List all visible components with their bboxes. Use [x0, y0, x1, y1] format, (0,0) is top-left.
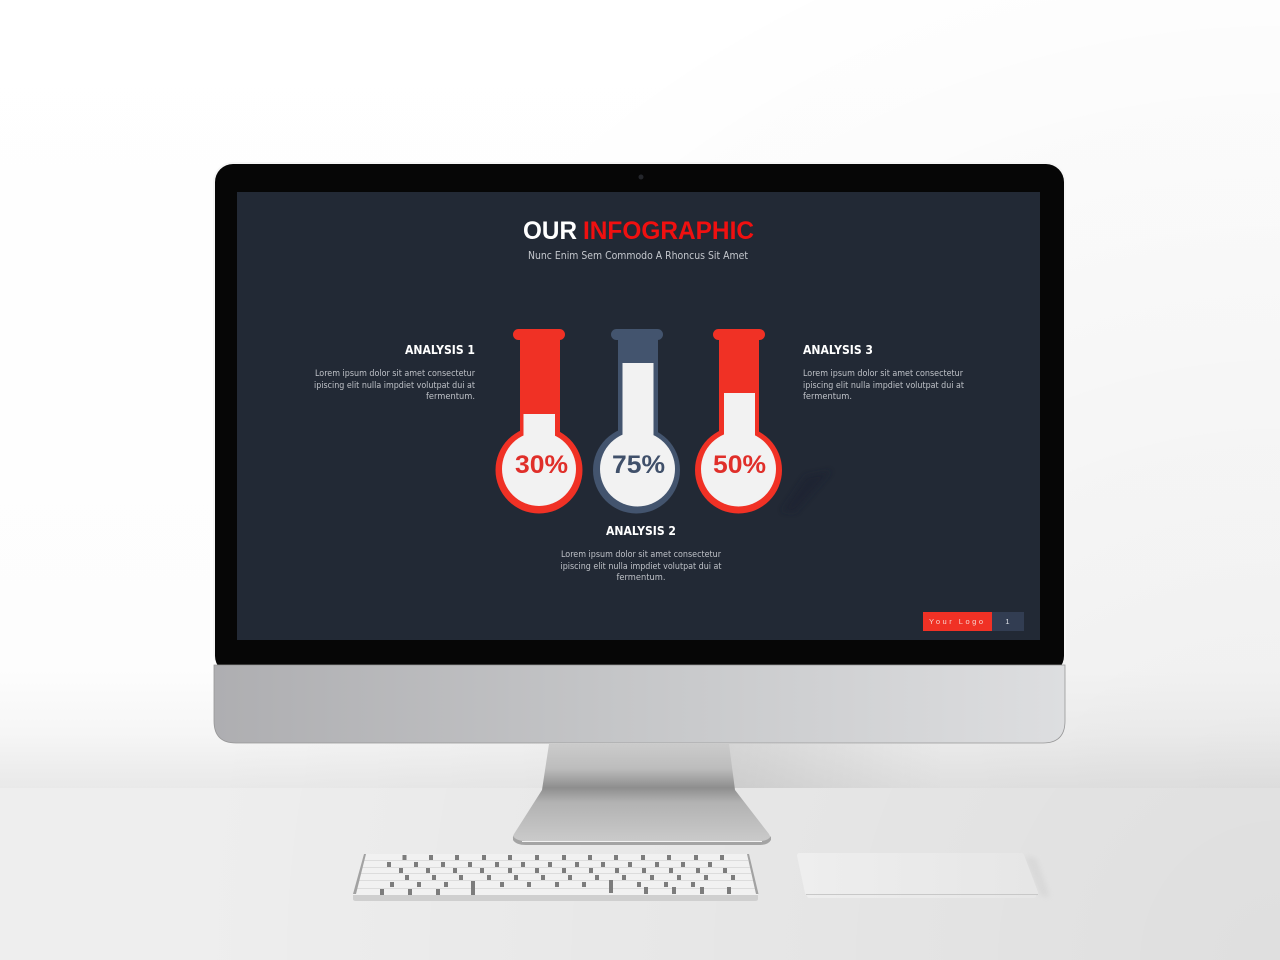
background: desk	[0, 788, 1280, 960]
title: OUR	[523, 217, 577, 245]
camera	[638, 174, 644, 180]
analysis 2 text block: Lorem ipsum dolor sit amet consectetur	[561, 550, 721, 560]
analysis 3 text block	[803, 343, 964, 402]
monitor stand	[513, 744, 771, 845]
analysis 2 text block: ANALYSIS 2	[606, 524, 676, 538]
analysis 1 text block: ANALYSIS 1	[405, 343, 475, 357]
analysis 2 text block	[560, 524, 722, 583]
analysis 1 text block: Lorem ipsum dolor sit amet consectetur	[315, 369, 475, 379]
value: 75%: 75%	[612, 451, 665, 479]
value: 50%: 50%	[713, 451, 766, 479]
flask 1: 30%	[496, 329, 582, 514]
analysis 1 text block	[314, 343, 475, 402]
title: INFOGRAPHIC	[583, 217, 754, 245]
monitor body	[213, 162, 1066, 743]
flask 3: 50%	[695, 329, 782, 514]
analysis 3 text block: Lorem ipsum dolor sit amet consectetur	[803, 369, 963, 379]
footer logo badge: Your Logo	[929, 617, 983, 626]
footer logo badge	[923, 612, 992, 631]
analysis 1 text block: ipiscing elit nulla impdiet volutpat dui at	[314, 381, 475, 391]
analysis 2 text block: ipiscing elit nulla impdiet volutpat dui at	[560, 562, 722, 572]
monitor chin	[214, 665, 1065, 743]
analysis 3 text block: ipiscing elit nulla impdiet volutpat dui at	[803, 381, 964, 391]
analysis 2 text block: fermentum.	[616, 573, 666, 583]
screen panel	[237, 192, 1040, 640]
flask 2: 75%	[593, 329, 680, 514]
keyboard	[353, 854, 758, 901]
analysis 3 text block: fermentum.	[803, 392, 852, 402]
footer page number: 1	[1005, 617, 1010, 626]
trackpad	[797, 853, 1050, 898]
footer page number	[992, 612, 1024, 631]
background: stand shadow on wall	[725, 744, 945, 788]
subtitle: Nunc Enim Sem Commodo A Rhoncus Sit Amet	[528, 249, 749, 262]
analysis 1 text block: fermentum.	[426, 392, 475, 402]
value: 30%: 30%	[515, 451, 568, 479]
flask shadow	[782, 471, 831, 512]
analysis 3 text block: ANALYSIS 3	[803, 343, 873, 357]
